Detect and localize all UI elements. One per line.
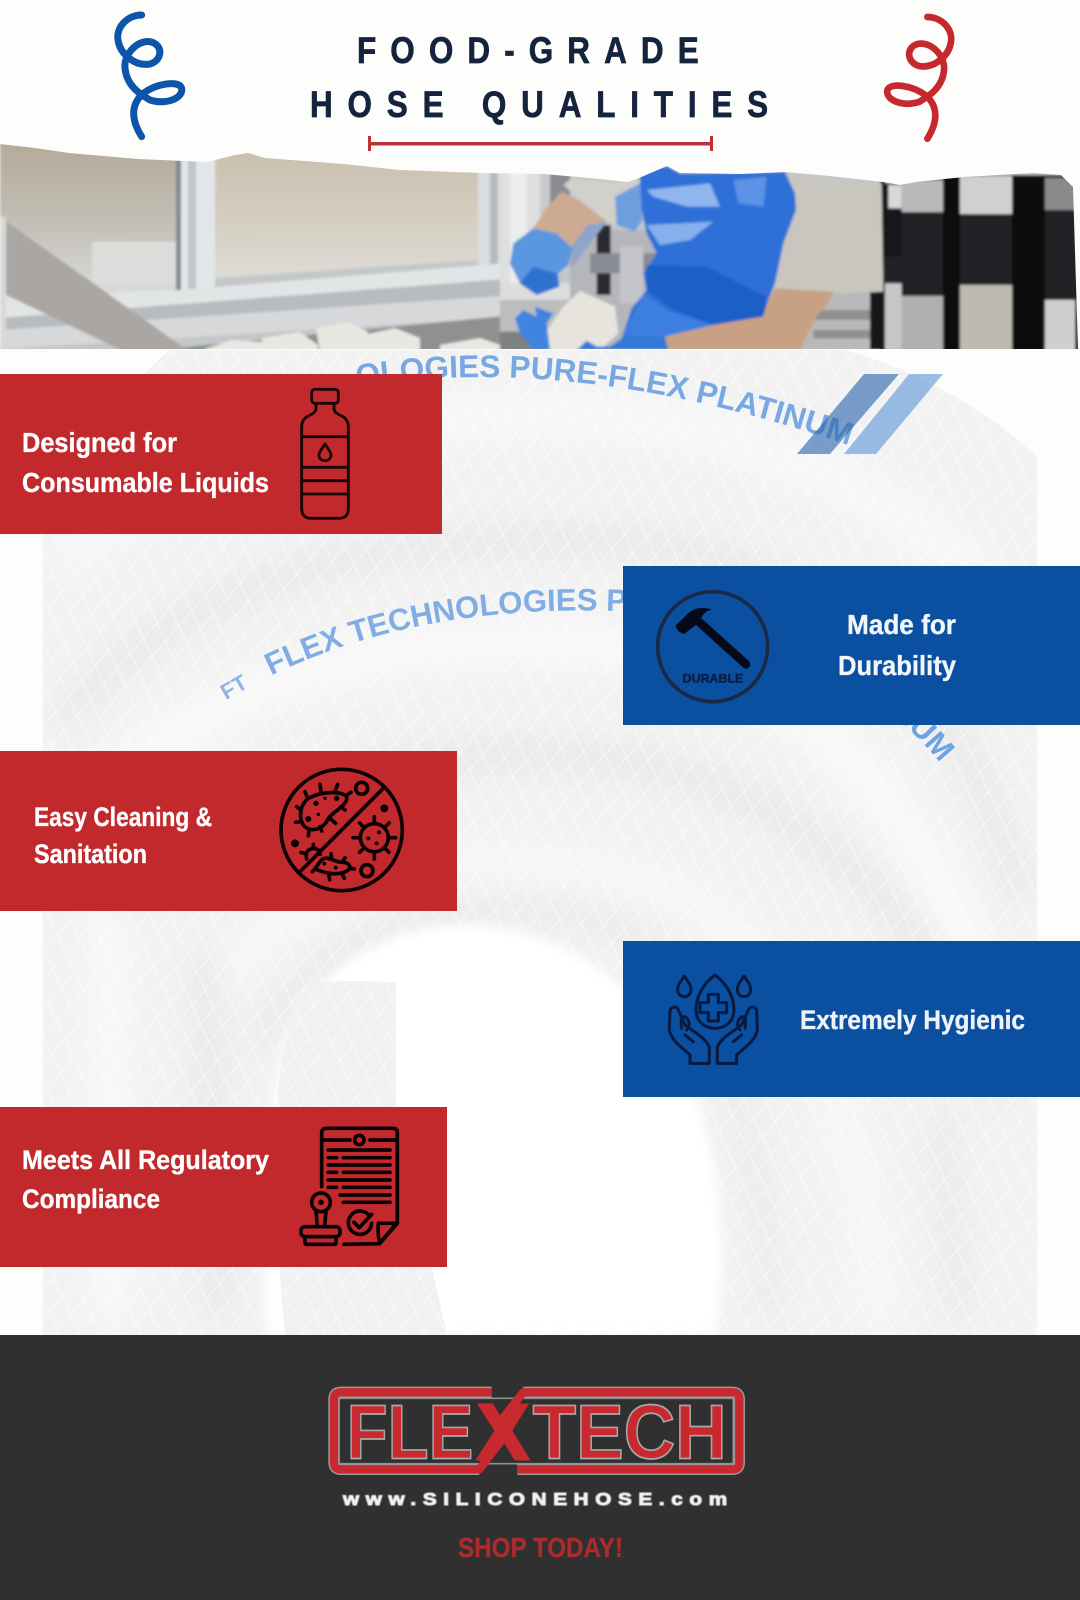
icon: red squiggle	[887, 17, 951, 139]
hose printed logo mark: FT	[216, 669, 252, 705]
title underline rule	[368, 136, 713, 151]
logo wordmark: FLE	[347, 1389, 473, 1475]
heading: meets all regulatory compliance: Compliance	[22, 1184, 160, 1214]
panel: consumable liquids	[0, 374, 442, 534]
heading: easy cleaning and sanitation: Sanitation	[34, 839, 147, 869]
lower background right	[801, 292, 871, 349]
icon: water bottle	[302, 389, 348, 518]
logo frame	[334, 1392, 739, 1469]
call to action: SHOP TODAY!	[458, 1532, 623, 1563]
apron	[622, 166, 796, 338]
logo wordmark: X	[478, 1389, 528, 1475]
forearm	[665, 288, 833, 350]
upper sleeve	[562, 179, 640, 224]
icon: blue squiggle	[118, 15, 182, 137]
heading: designed for consumable liquids	[22, 427, 269, 498]
cheese block	[545, 291, 618, 350]
flextech logo	[334, 1389, 739, 1475]
heading: meets all regulatory compliance	[22, 1145, 269, 1214]
logo wordmark	[347, 1389, 727, 1475]
icon: hands with drop and cross	[669, 975, 757, 1063]
lower left glove	[515, 307, 553, 350]
heading: easy cleaning and sanitation: Easy Cleaning &	[34, 802, 212, 832]
title line 1: FOOD-GRADE	[357, 31, 699, 72]
hose background image	[43, 350, 1037, 1335]
hose printed text: upper coil: OLOGIES PURE-FLEX PLATINUM	[356, 355, 854, 444]
panel: durability	[623, 566, 1080, 725]
heading: designed for consumable liquids: Designed for	[22, 427, 177, 458]
hero photo: worker handling food in blue apron and gloves	[0, 140, 1080, 352]
right sleeve	[775, 175, 883, 293]
panel: easy cleaning	[0, 751, 457, 911]
right shelving	[880, 175, 1080, 352]
decorative diagonal stripes	[797, 374, 943, 454]
heading: meets all regulatory compliance: Meets All Regulatory	[22, 1145, 269, 1175]
icon: no bacteria	[281, 769, 402, 891]
icon: document and stamp	[301, 1128, 397, 1244]
upper arm	[533, 192, 607, 267]
heading: made for durability	[838, 609, 956, 681]
upper glove	[510, 228, 573, 295]
icon: durable hammer: DURABLE	[683, 671, 743, 685]
panel: hygienic	[623, 941, 1080, 1097]
title line 2: HOSE QUALITIES	[310, 85, 768, 126]
heading: easy cleaning and sanitation	[34, 802, 212, 869]
title	[310, 31, 768, 126]
icon: durable hammer	[658, 592, 768, 702]
heading: made for durability: Made for	[847, 609, 956, 640]
logo wordmark: TECH	[533, 1389, 727, 1475]
white blocks on table	[205, 322, 500, 352]
worker, mapped in close-up coordinates	[500, 166, 902, 350]
website url: www.SILICONEHOSE.com	[342, 1489, 727, 1510]
heading: designed for consumable liquids: Consumable Liquids	[22, 467, 269, 498]
footer band	[0, 1335, 1080, 1600]
heading: extremely hygienic: Extremely Hygienic	[800, 1005, 1025, 1035]
heading: made for durability: Durability	[838, 650, 956, 681]
panel: regulatory compliance	[0, 1107, 447, 1267]
hose printed text: lower coil end: PLATINUM	[905, 725, 955, 762]
lower right glove	[577, 335, 668, 350]
background behind worker	[499, 278, 511, 284]
